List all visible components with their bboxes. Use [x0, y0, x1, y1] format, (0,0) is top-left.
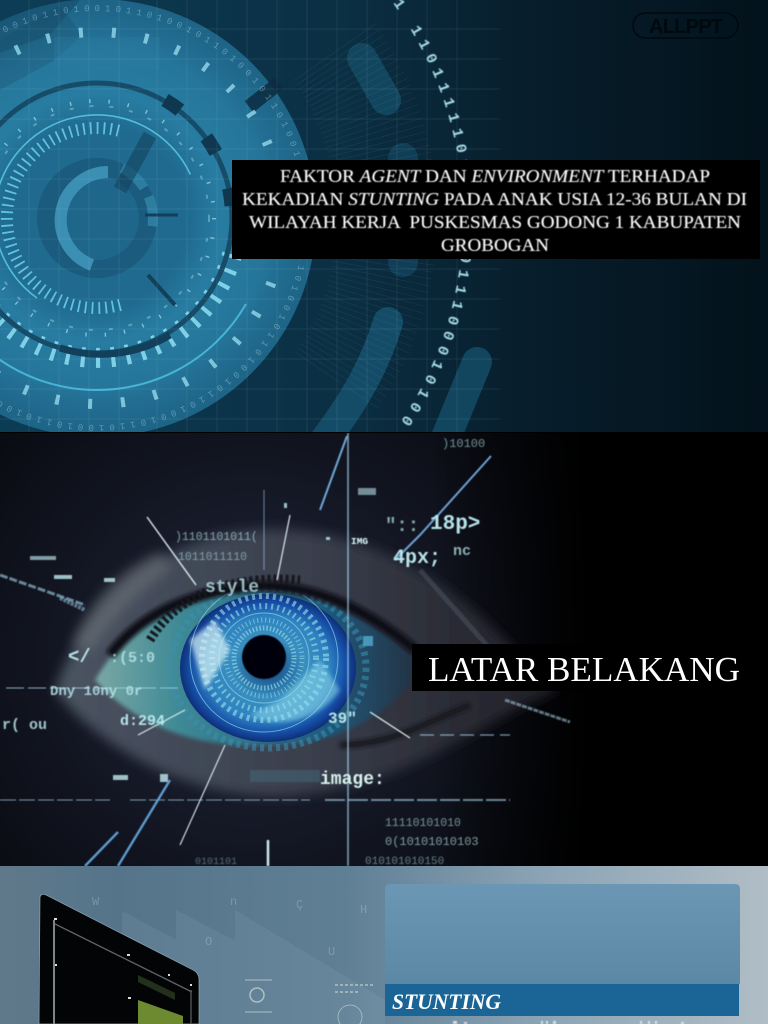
panel heading bar: [385, 984, 739, 1016]
floating code text: [2, 437, 485, 868]
slide 2: digital eye: [0, 433, 768, 868]
floating code text: Dny 10ny 0r: [50, 684, 142, 700]
floating code text: 4px;: [393, 547, 441, 570]
clipped body text tops: [453, 1021, 684, 1024]
eye: [55, 530, 560, 796]
floating code text: IMG: [351, 536, 368, 547]
eye: iris: [180, 584, 356, 742]
panel heading text: STUNTING: [392, 989, 501, 1014]
eye: pixel halo: [170, 588, 366, 748]
title text: [242, 166, 747, 255]
floating code text: r( ou: [2, 717, 47, 734]
dial: dark ring: [0, 83, 232, 353]
screen glyphs: [92, 897, 366, 955]
floating code text: 11110101010: [385, 817, 461, 830]
eye: sclera: [95, 590, 425, 746]
radial fibre lines: [335, 52, 384, 384]
slide 1: technology dial background: [0, 0, 768, 432]
eye: skin: [55, 530, 560, 796]
eye: upper lid highlight: [72, 552, 172, 650]
floating code text: </: [68, 646, 91, 668]
dial: dark segment blocks: [0, 0, 283, 112]
dial: inner disc: [12, 133, 182, 303]
screen glyphs: n: [230, 895, 237, 909]
screen glyphs: U: [328, 945, 335, 959]
dial: binary digit ring: [0, 11, 304, 425]
floating code text: 0(10101010103: [385, 835, 479, 849]
screen glyphs: H: [360, 903, 367, 917]
dial: cyan inner ticks: [7, 128, 120, 308]
floating code text: d:294: [120, 713, 165, 730]
watermark: [633, 13, 738, 38]
title text: FAKTOR AGENT DAN ENVIRONMENT TERHADAP: [280, 166, 710, 186]
floating code text: 1011011110: [178, 551, 247, 564]
dial: bold tick ring: [0, 252, 242, 368]
eye: pupil: [242, 635, 286, 679]
dial: small tick ring: [0, 101, 214, 335]
floating code text: 010101010150: [365, 856, 444, 868]
dial: fine right ticks: [0, 106, 209, 330]
floating code text: nc: [453, 543, 471, 560]
slide 3: stunting: [0, 866, 768, 1024]
title box: [232, 160, 760, 259]
screen glyphs: O: [205, 935, 212, 949]
screen glyphs: F: [483, 925, 490, 939]
screen glyphs: W: [92, 895, 100, 909]
screen glyphs: Ç: [296, 898, 303, 912]
screen dial widget: [245, 980, 375, 1024]
translucent screens: [122, 910, 252, 1024]
stunting panel: [385, 884, 740, 1024]
dial: cyan inner arcs: [0, 115, 190, 298]
section heading box: [412, 644, 752, 691]
floating code text: )10100: [442, 437, 485, 451]
dial: outer dashes: [0, 32, 283, 404]
floating code text: 18p>: [430, 513, 480, 536]
floating code text: 39": [328, 710, 357, 728]
floating code text: image:: [320, 770, 385, 790]
eye: lower lid line: [340, 705, 470, 745]
floating code text: "::: [385, 515, 431, 537]
floating code text: )1101101011(: [175, 531, 258, 544]
title text: WILAYAH KERJA PUSKESMAS GODONG 1 KABUPATEN: [249, 212, 741, 232]
screen glyphs: J: [401, 940, 408, 954]
watermark: ALLPPT: [649, 16, 723, 38]
title text: KEKADIAN STUNTING PADA ANAK USIA 12-36 BULAN DI: [242, 189, 747, 209]
section heading text: LATAR BELAKANG: [428, 650, 740, 689]
title text: GROBOGAN: [441, 235, 549, 255]
data light streaks: [0, 433, 570, 866]
dial: cyan arc, lower: [0, 304, 247, 391]
faint grid overlay: [0, 0, 500, 432]
laptop: screen chart: [53, 918, 192, 1024]
eye: upper lash line: [110, 586, 415, 655]
floating code text: :(5:0: [110, 650, 155, 667]
laptop: [39, 894, 199, 1024]
outer binary digit arc: [393, 0, 472, 426]
floating code text: style: [205, 578, 259, 598]
floating code text: 0101101: [195, 857, 237, 868]
decorative capsule shapes: [325, 58, 477, 440]
floating data blocks: [30, 488, 376, 782]
